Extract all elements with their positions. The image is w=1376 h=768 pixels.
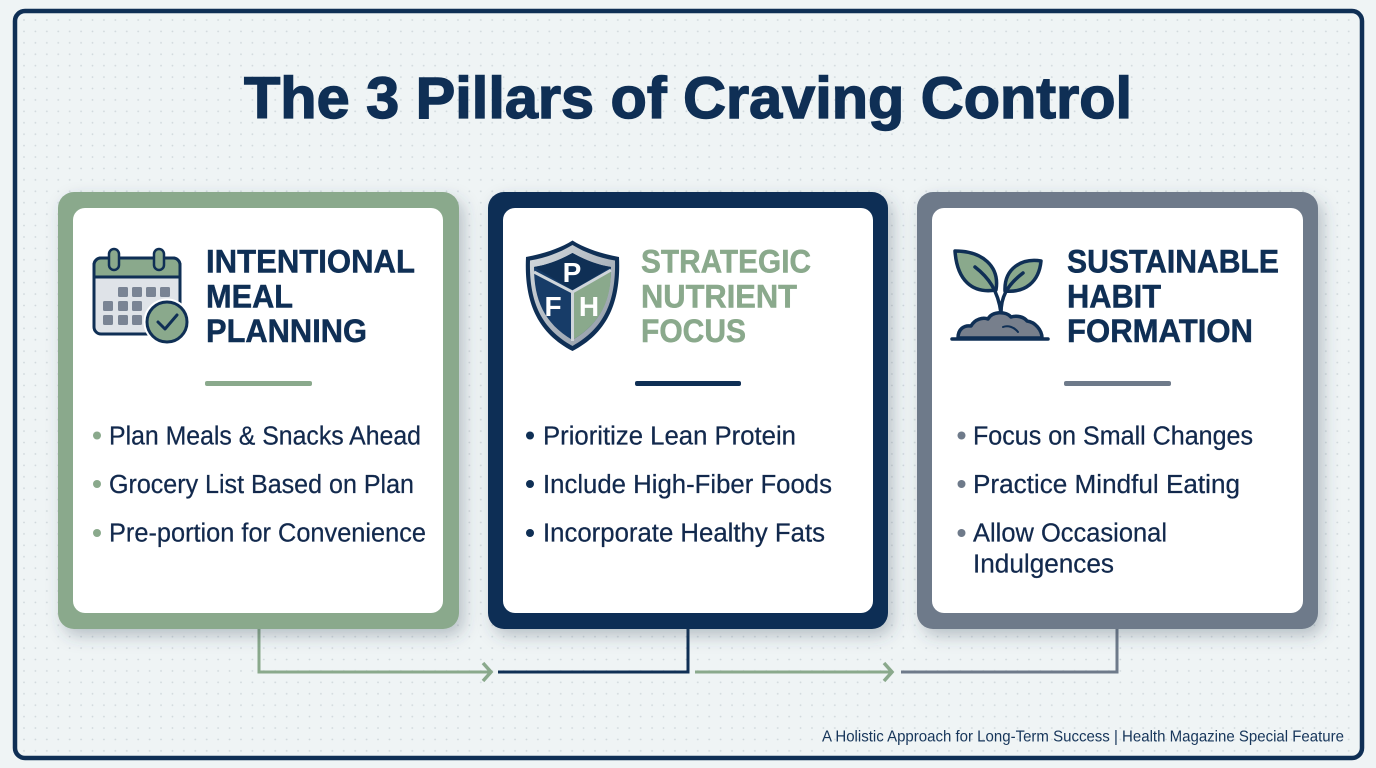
divider bbox=[1064, 381, 1171, 386]
icon: shield with P F H: H bbox=[579, 291, 599, 322]
bullet list: Plan Meals & Snacks Ahead bbox=[109, 422, 421, 450]
bullet list bbox=[526, 422, 832, 548]
bullet list: Allow Occasional bbox=[973, 520, 1167, 548]
card inner white bbox=[503, 208, 873, 613]
card inner white bbox=[73, 208, 443, 613]
heading: FOCUS bbox=[641, 313, 746, 349]
bullet list: Include High-Fiber Foods bbox=[543, 471, 832, 499]
bullet list: Practice Mindful Eating bbox=[973, 471, 1240, 499]
bullet list: Pre-portion for Convenience bbox=[109, 520, 426, 548]
icon: sprout in soil bbox=[952, 251, 1048, 339]
heading: HABIT bbox=[1067, 278, 1161, 314]
heading: NUTRIENT bbox=[641, 278, 797, 314]
heading: MEAL bbox=[206, 278, 293, 314]
icon: shield with P F H bbox=[526, 240, 619, 351]
panel: intentional meal planning bbox=[58, 192, 459, 629]
heading: PLANNING bbox=[206, 313, 367, 349]
card frame gray bbox=[917, 192, 1318, 629]
bullet list: Grocery List Based on Plan bbox=[109, 471, 414, 499]
bullet list: Prioritize Lean Protein bbox=[543, 422, 796, 450]
heading bbox=[206, 244, 415, 349]
heading: STRATEGIC bbox=[641, 244, 811, 280]
bullet list bbox=[93, 422, 426, 548]
card frame navy bbox=[488, 192, 888, 629]
card frame green bbox=[58, 192, 459, 629]
icon: calendar with check bbox=[94, 249, 187, 342]
divider bbox=[635, 381, 741, 386]
connector: navy elbow line bbox=[498, 629, 688, 672]
title: The 3 Pillars of Craving Control bbox=[244, 66, 1132, 131]
icon: shield with P F H: P bbox=[563, 257, 581, 288]
heading: INTENTIONAL bbox=[206, 244, 415, 280]
heading: FORMATION bbox=[1067, 313, 1253, 349]
divider bbox=[205, 381, 312, 386]
heading bbox=[641, 244, 811, 349]
card inner white bbox=[932, 208, 1303, 613]
connector: gray elbow line bbox=[901, 629, 1117, 672]
bullet list: Incorporate Healthy Fats bbox=[543, 520, 825, 548]
footer caption: A Holistic Approach for Long-Term Success | Health Magazine Special Feature bbox=[822, 728, 1344, 746]
icon: shield with P F H: F bbox=[544, 291, 562, 322]
panel: sustainable habit formation bbox=[917, 192, 1318, 629]
connector: green elbow arrow bbox=[259, 629, 491, 681]
bullet list: Focus on Small Changes bbox=[973, 422, 1253, 450]
heading: SUSTAINABLE bbox=[1067, 244, 1279, 280]
bullet list bbox=[958, 422, 1253, 578]
panel: strategic nutrient focus bbox=[488, 192, 888, 629]
heading bbox=[1067, 244, 1279, 349]
connector: second green arrow bbox=[695, 663, 892, 681]
bullet list: Indulgences bbox=[973, 550, 1114, 578]
